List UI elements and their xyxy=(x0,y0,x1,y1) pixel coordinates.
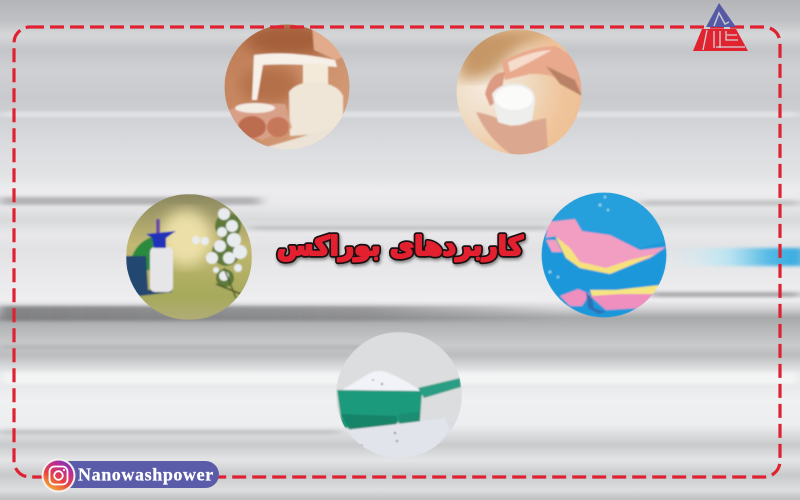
photo: detergent powder scoop xyxy=(336,332,462,460)
logo: triangle mark xyxy=(693,3,748,51)
badge pill xyxy=(46,461,219,488)
instagram icon xyxy=(42,458,76,492)
photo: garden sprayer and blossoms xyxy=(126,194,252,320)
title: کاربردهای بوراکس xyxy=(277,231,524,262)
photo: lotion pump bottle xyxy=(224,22,350,152)
instagram handle: Nanowashpower xyxy=(78,464,214,484)
instagram badge xyxy=(42,458,219,492)
photo: hand with cream jar xyxy=(456,29,582,157)
title: کاربردهای بوراکس xyxy=(277,231,524,262)
photo: colorful bath bomb xyxy=(541,192,668,318)
